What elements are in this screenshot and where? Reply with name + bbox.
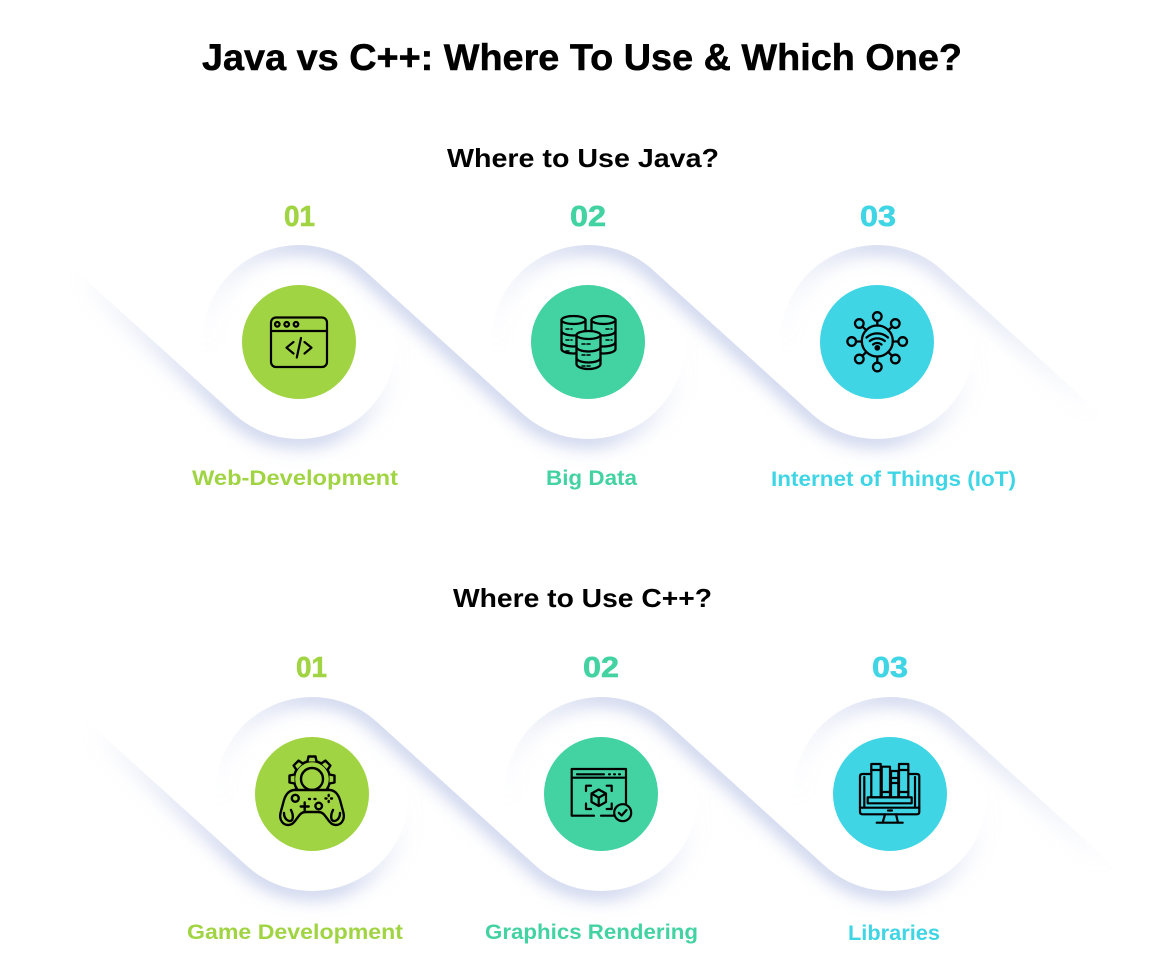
label: internet of things: Internet of Things (IoT) xyxy=(771,468,1016,491)
step 02: graphics rendering xyxy=(485,652,698,944)
label: game development: Game Development xyxy=(187,921,403,944)
wave ribbon: Java xyxy=(80,245,1095,439)
green circle xyxy=(255,737,369,851)
label: libraries: Libraries xyxy=(848,922,940,945)
teal circle xyxy=(531,285,645,399)
icon: rendering window with cube xyxy=(572,769,631,821)
icon: monitor with books xyxy=(860,764,919,823)
label: web development: Web-Development xyxy=(192,467,398,490)
step 03: internet of things xyxy=(771,201,1016,491)
number 02: 02 xyxy=(583,652,619,684)
heading: where to use C++: Where to Use C++? xyxy=(453,583,712,613)
label: graphics rendering: Graphics Rendering xyxy=(485,921,698,944)
number 02: 02 xyxy=(570,201,606,233)
number 01: 01 xyxy=(296,652,327,684)
number 03: 03 xyxy=(872,652,908,684)
number 01: 01 xyxy=(284,201,315,233)
title: Java vs C++: Where To Use & Which One? xyxy=(202,37,962,78)
step 01: game development xyxy=(187,652,403,944)
icon: browser code window xyxy=(271,318,327,367)
icon: database stacks xyxy=(562,316,616,369)
green circle xyxy=(242,285,356,399)
wave ribbon: C++ xyxy=(93,697,1108,891)
step 01: web development xyxy=(192,201,398,490)
cyan circle xyxy=(820,285,934,399)
icon: connected wifi hub xyxy=(847,312,907,371)
step 03: libraries xyxy=(833,652,947,945)
label: big data: Big Data xyxy=(546,467,637,490)
teal circle xyxy=(544,737,658,851)
heading: where to use Java: Where to Use Java? xyxy=(447,143,719,173)
number 03: 03 xyxy=(860,201,896,233)
icon: gear and game controller xyxy=(280,756,344,825)
step 02: big data xyxy=(531,201,645,490)
cyan circle xyxy=(833,737,947,851)
